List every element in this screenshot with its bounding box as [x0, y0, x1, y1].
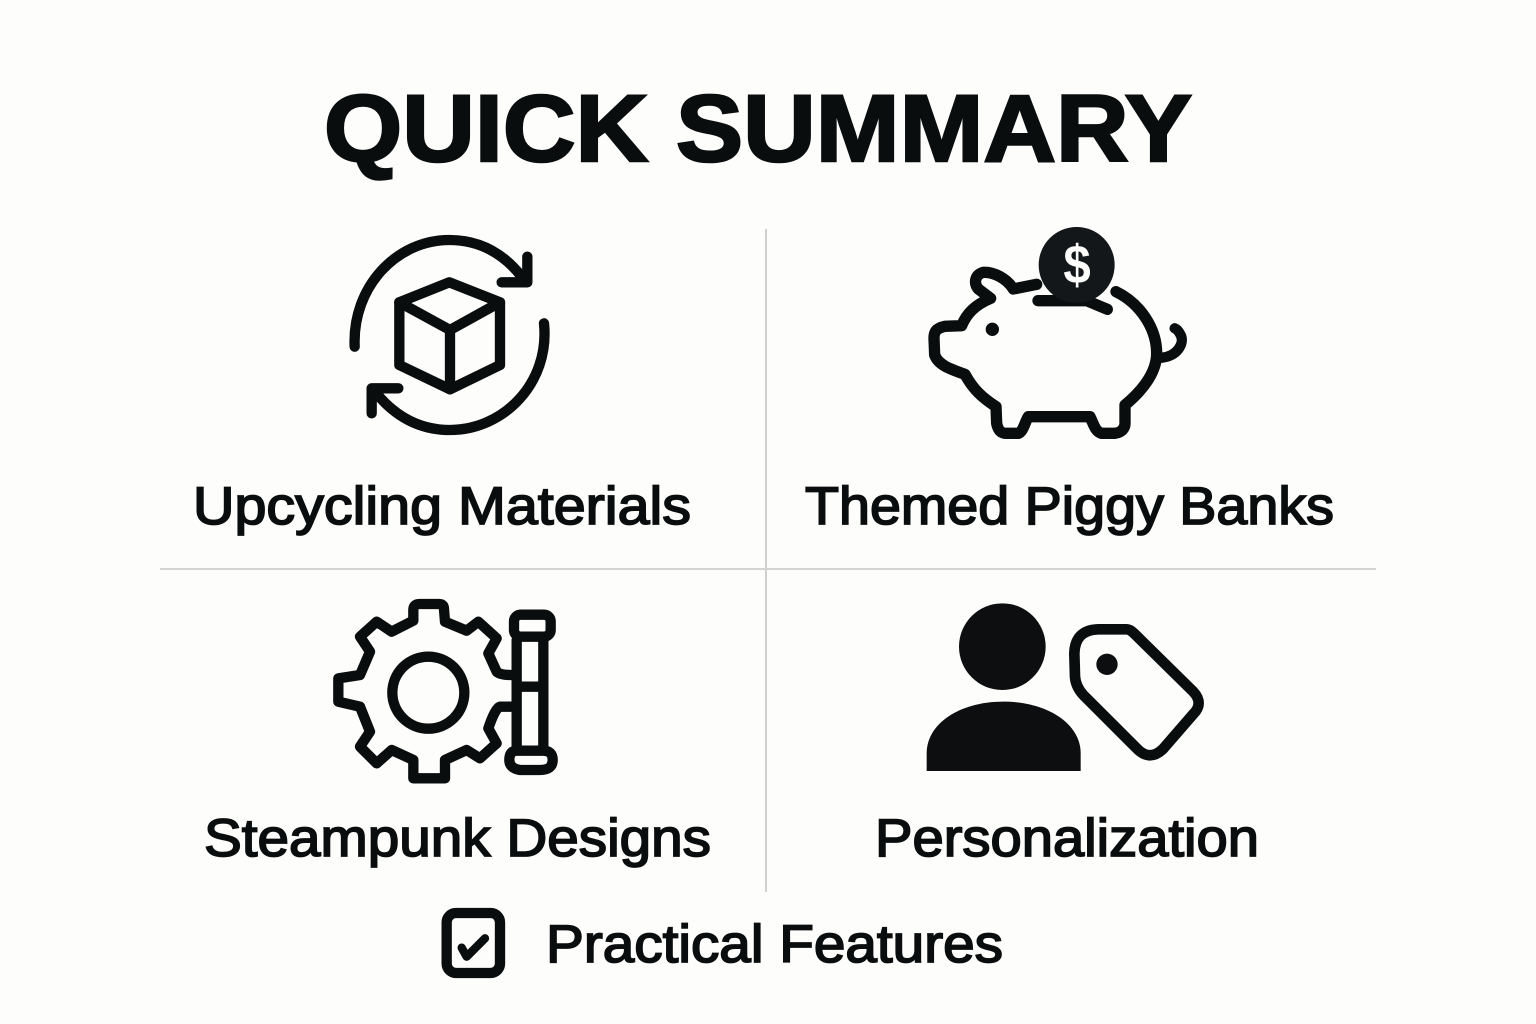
tag outline: [1074, 629, 1199, 755]
pig tail: [1162, 328, 1182, 358]
person body: [927, 702, 1081, 771]
coin: [1039, 227, 1115, 303]
icon: person with price tag: [927, 603, 1199, 771]
label: upcycling materials: Upcycling Materials: [193, 477, 691, 536]
tag hole: [1096, 654, 1118, 675]
label: practical features: Practical Features: [546, 915, 1003, 974]
icon: steampunk gear with pipe: [338, 604, 553, 778]
label: personalization: Personalization: [875, 809, 1259, 868]
pig body outline: [934, 272, 1157, 433]
label: steampunk designs: Steampunk Designs: [204, 809, 711, 868]
pig eye: [986, 323, 999, 336]
coin slot: [1038, 301, 1107, 309]
person head: [959, 603, 1046, 690]
label: themed piggy banks: Themed Piggy Banks: [805, 477, 1334, 536]
dollar sign: $: [1063, 234, 1091, 296]
title: QUICK SUMMARY: [324, 76, 1192, 182]
icon: checkbox: [447, 913, 500, 973]
icon: piggy bank with coin: [934, 227, 1182, 433]
icon: upcycling box with circular arrows: [355, 240, 545, 430]
